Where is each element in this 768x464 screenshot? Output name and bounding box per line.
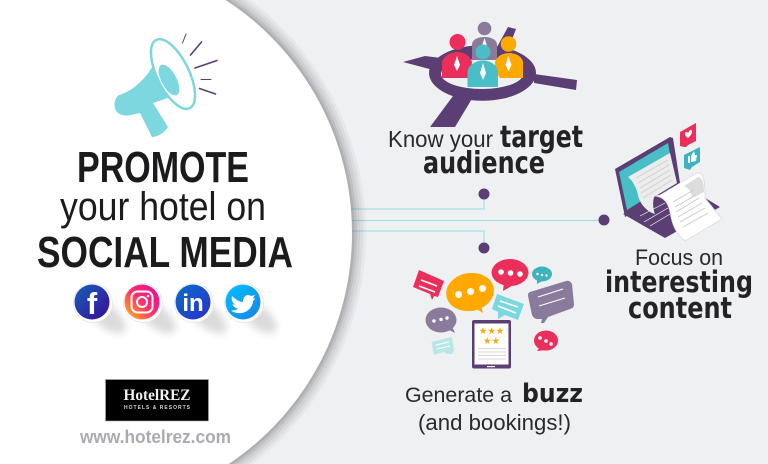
- icon: speech bubbles: [413, 259, 574, 368]
- text: focus on interesting content: [605, 245, 753, 325]
- icon: twitter: [224, 284, 282, 340]
- bubble: red rectangle: [413, 270, 444, 300]
- bubble: grey round: [426, 308, 456, 333]
- text: know your target audience: target: [500, 120, 583, 155]
- logo: HotelREZ: HotelREZ: [124, 387, 190, 404]
- icon: review tablet: [472, 320, 511, 368]
- website url: www.hotelrez.com: [79, 427, 231, 447]
- icon: instagram: [124, 284, 181, 340]
- icon: social media buttons: [74, 284, 282, 340]
- icon: target audience: [403, 22, 577, 127]
- text: know your target audience: audience: [423, 146, 545, 181]
- bubble: small red: [534, 330, 558, 351]
- text: generate a buzz and bookings: (and bookings!): [418, 410, 571, 435]
- title: PROMOTE: [77, 143, 249, 192]
- icon: laptop with content: [615, 123, 722, 241]
- icon: review tablet: ★★★: [479, 326, 504, 337]
- title: your hotel on: [60, 185, 266, 229]
- icon: like notification: [684, 147, 700, 170]
- icon: review tablet: ★★: [483, 336, 500, 347]
- person: red: [442, 34, 472, 78]
- text: generate a buzz and bookings: [405, 379, 583, 435]
- icon: facebook: f: [87, 286, 98, 321]
- bubble: purple rectangle: [528, 281, 574, 323]
- person: teal: [468, 44, 498, 87]
- title: [37, 143, 293, 277]
- person: orange: [495, 36, 523, 78]
- text: know your target audience: Know your: [388, 126, 493, 152]
- bubble: light teal rectangle: [492, 294, 524, 320]
- bubble: small teal: [532, 266, 552, 284]
- bubble: red round: [492, 259, 528, 291]
- node: content: [598, 214, 610, 226]
- icon: linkedin: in: [182, 290, 204, 317]
- icon: heart notification: [680, 123, 696, 147]
- bubble: orange: [443, 269, 497, 315]
- bubble: pale rectangle: [432, 337, 454, 355]
- icon: facebook: [74, 284, 131, 340]
- icon: megaphone: [115, 33, 217, 137]
- logo: HotelREZ: [106, 380, 208, 421]
- connector lines: [350, 197, 600, 245]
- text: know your target audience: [388, 120, 583, 181]
- text: focus on interesting content: content: [628, 291, 732, 325]
- panel: white circle: [0, 0, 352, 464]
- title: SOCIAL MEDIA: [37, 228, 293, 277]
- text: generate a buzz and bookings: buzz: [522, 379, 583, 409]
- icon: linkedin: [174, 284, 232, 340]
- person: grey: [472, 22, 497, 60]
- logo: HotelREZ: HOTELS & RESORTS: [124, 405, 191, 411]
- text: focus on interesting content: Focus on: [635, 245, 723, 270]
- text: generate a buzz and bookings: Generate a: [405, 383, 512, 407]
- node: target audience: [478, 188, 490, 200]
- node: buzz: [478, 242, 490, 254]
